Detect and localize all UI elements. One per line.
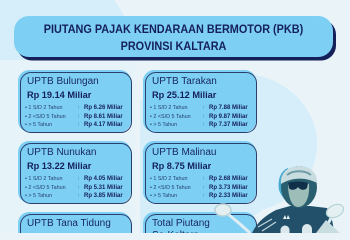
breakdown: Nunukan: Rp 3.85 Miliar xyxy=(84,193,123,199)
heading: Nunukan: UPTB Nunukan xyxy=(27,147,96,158)
breakdown: Bulungan: Rp 4.17 Miliar xyxy=(84,122,123,128)
heading: Bulungan: UPTB Bulungan xyxy=(27,76,99,87)
breakdown: Nunukan: : xyxy=(78,193,80,199)
heading: Malinau: UPTB Malinau xyxy=(152,147,216,158)
panel: UPTB Tarakan xyxy=(143,70,257,133)
breakdown: Nunukan: : xyxy=(78,176,80,182)
title banner: PROVINSI KALTARA xyxy=(121,39,226,53)
breakdown: Malinau: : xyxy=(203,185,204,191)
breakdown: Bulungan: Rp 6.26 Miliar xyxy=(84,105,123,111)
breakdown: Nunukan: Rp 4.05 Miliar xyxy=(84,176,123,182)
breakdown: Bulungan: Rp 8.61 Miliar xyxy=(84,114,123,120)
shirt badges xyxy=(280,224,312,233)
breakdown: Tarakan: : xyxy=(203,122,204,128)
breakdown: Tarakan: Rp 9.87 Miliar xyxy=(209,114,248,120)
heading: Total Piutang: Total Piutang xyxy=(152,218,210,229)
face xyxy=(288,182,309,207)
breakdown: Malinau: : xyxy=(203,176,204,182)
breakdown: Malinau: : xyxy=(203,193,204,199)
breakdown: Bulungan: • 2 <S/D 5 Tahun xyxy=(25,114,66,120)
breakdown: Tarakan: • > 5 Tahun xyxy=(150,122,177,128)
breakdown: Tarakan: : xyxy=(203,105,204,111)
breakdown: Nunukan: • 1 S/D 2 Tahun xyxy=(25,176,62,182)
sleeve stripes xyxy=(258,219,276,231)
breakdown: Bulungan: : xyxy=(78,122,80,128)
breakdown: Malinau: Rp 3.73 Miliar xyxy=(209,185,248,191)
breakdown: Bulungan: • > 5 Tahun xyxy=(25,122,52,128)
breakdown: Tarakan: • 2 <S/D 5 Tahun xyxy=(150,114,191,120)
heading: Tarakan: UPTB Tarakan xyxy=(152,76,217,87)
breakdown: Bulungan xyxy=(25,104,123,128)
breakdown: Nunukan xyxy=(25,176,123,199)
breakdown: Nunukan: : xyxy=(78,185,80,191)
helmet xyxy=(279,166,317,208)
total: Tarakan: Rp 25.12 Miliar xyxy=(152,90,216,100)
panel: UPTB Tana Tidung xyxy=(18,212,132,233)
breakdown: Nunukan: Rp 5.31 Miliar xyxy=(84,185,123,191)
left mirror xyxy=(215,204,250,233)
title banner: PIUTANG PAJAK KENDARAAN BERMOTOR (PKB) xyxy=(44,22,303,36)
panel: UPTB Malinau xyxy=(143,141,257,204)
breakdown: Malinau: • 1 S/D 2 Tahun xyxy=(150,176,187,182)
title banner xyxy=(14,16,333,57)
total: Nunukan: Rp 13.22 Miliar xyxy=(27,160,91,170)
breakdown: Bulungan: : xyxy=(78,105,80,111)
sunglasses xyxy=(288,182,308,190)
total: Malinau: Rp 8.75 Miliar xyxy=(152,160,211,170)
breakdown: Malinau: Rp 2.33 Miliar xyxy=(209,193,248,199)
breakdown: Tarakan: Rp 7.37 Miliar xyxy=(209,122,248,128)
heading: Tana Tidung: UPTB Tana Tidung xyxy=(27,218,111,229)
panel: UPTB Nunukan xyxy=(18,141,132,204)
breakdown: Tarakan: : xyxy=(203,114,204,120)
breakdown: Malinau: • > 5 Tahun xyxy=(150,193,177,199)
panel: UPTB Bulungan xyxy=(18,70,132,133)
breakdown: Tarakan xyxy=(150,104,248,128)
breakdown: Malinau xyxy=(150,176,248,199)
breakdown: Bulungan: : xyxy=(78,114,80,120)
logo on shirt xyxy=(283,215,290,219)
breakdown: Nunukan: • > 5 Tahun xyxy=(25,193,52,199)
breakdown: Bulungan: • 1 S/D 2 Tahun xyxy=(25,105,62,111)
breakdown: Malinau: • 2 <S/D 5 Tahun xyxy=(150,185,191,191)
breakdown: Nunukan: • 2 <S/D 5 Tahun xyxy=(25,185,66,191)
breakdown: Tarakan: Rp 7.88 Miliar xyxy=(209,105,248,111)
breakdown: Tarakan: • 1 S/D 2 Tahun xyxy=(150,105,187,111)
right mirror xyxy=(316,202,346,233)
panel: Total Piutang xyxy=(143,212,257,233)
torso xyxy=(252,206,334,233)
breakdown: Malinau: Rp 2.68 Miliar xyxy=(209,176,248,182)
total: Bulungan: Rp 19.14 Miliar xyxy=(27,90,91,100)
